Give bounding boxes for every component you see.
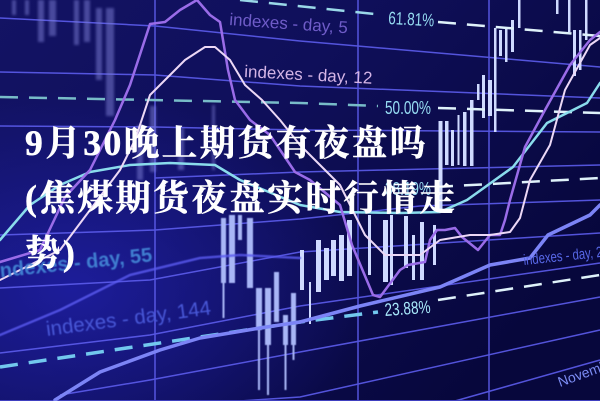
- label: indexes day 144: indexes - day, 144: [45, 296, 212, 341]
- candlesticks: faded upper left: [12, 0, 215, 180]
- label: 38.19%: 38.19%: [385, 179, 431, 199]
- curve: purple day 5: [0, 0, 600, 297]
- curve: cyan: [0, 83, 600, 240]
- title: 9月30晚上期货有夜盘吗(焦煤期货夜盘实时行情走势): [25, 123, 457, 273]
- candlesticks: right of title: [300, 0, 588, 324]
- label: 23.88%: 23.88%: [384, 297, 431, 320]
- label: indexes day 12: indexes - day, 12: [244, 62, 373, 88]
- curve: blue thick: [55, 205, 600, 400]
- label: indexes day 5: indexes - day, 5: [229, 10, 349, 37]
- curve: blue long-term left: [0, 255, 300, 335]
- label: 50.00%: 50.00%: [385, 98, 431, 118]
- label: 61.81%: 61.81%: [388, 8, 435, 30]
- curve: pink day 12: [0, 38, 600, 280]
- candlesticks: centre: [221, 215, 296, 395]
